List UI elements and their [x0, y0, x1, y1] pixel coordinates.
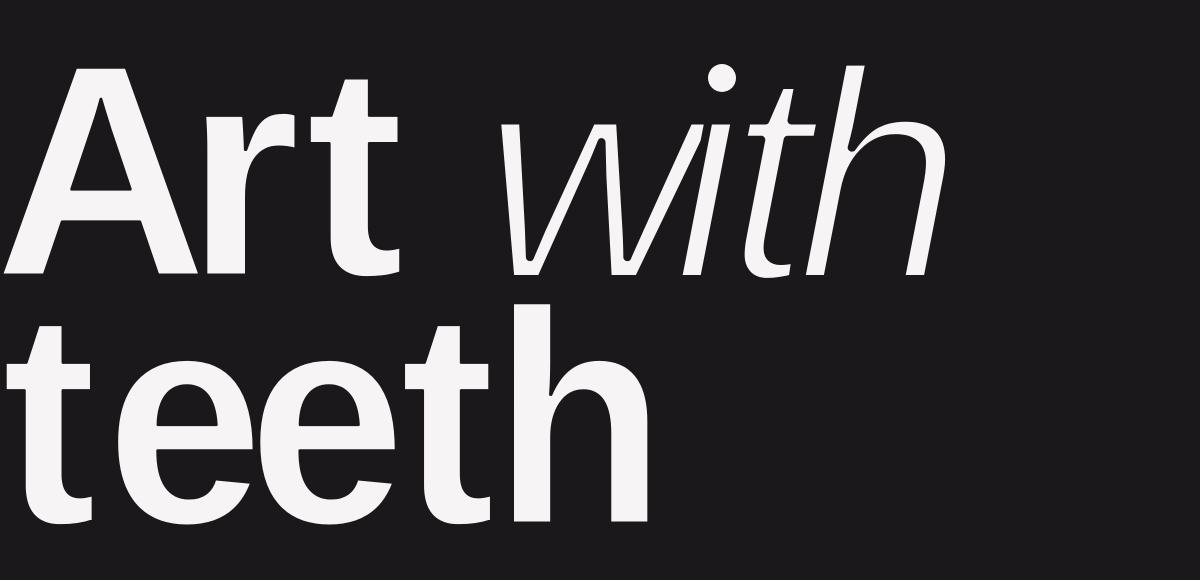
heading word: Art: Art	[0, 2, 404, 340]
heading word: teeth: teeth	[2, 249, 666, 580]
heading word: with: with	[482, 7, 963, 343]
